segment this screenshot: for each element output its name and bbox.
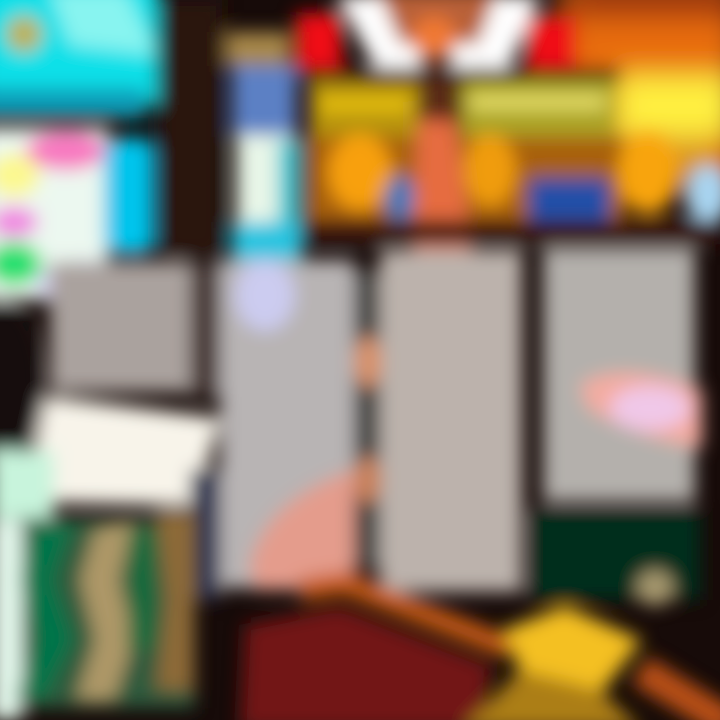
panel: white paper area (0, 396, 220, 600)
chart: green and tan wavy stripes (0, 510, 195, 720)
panel: olive gold heading bands (300, 68, 620, 140)
callout: pink highlight right (580, 373, 702, 448)
panel: dark green base (530, 510, 700, 606)
arrow: orange diagonal line (300, 583, 510, 648)
gap strip between cards (354, 270, 382, 570)
panel: orange and blue icon row (305, 130, 720, 225)
icon: dark circle (0, 303, 42, 467)
panel: gold block (462, 606, 642, 720)
panel: gray card two (220, 259, 354, 588)
panel: red floor (240, 606, 492, 720)
panel: central orange figure (412, 120, 472, 250)
title block: white letter shape (336, 0, 540, 70)
panel: top-left cyan banner (0, 0, 158, 118)
dark brown column (160, 0, 222, 255)
callout: pink highlight lower (250, 470, 354, 590)
panel: pastel colour list (0, 128, 154, 308)
panel: gray card four (543, 248, 695, 502)
gap strip beside card one (190, 262, 220, 397)
panel: top orange glow (560, 0, 720, 190)
arrow: lower right orange stroke (640, 670, 720, 720)
panel: gray card one (50, 262, 190, 392)
panel: gray card three (380, 250, 522, 592)
divider band: brown strip (300, 220, 720, 244)
panel: upper column blue and white (226, 32, 302, 264)
title block: red side marks (296, 0, 576, 70)
